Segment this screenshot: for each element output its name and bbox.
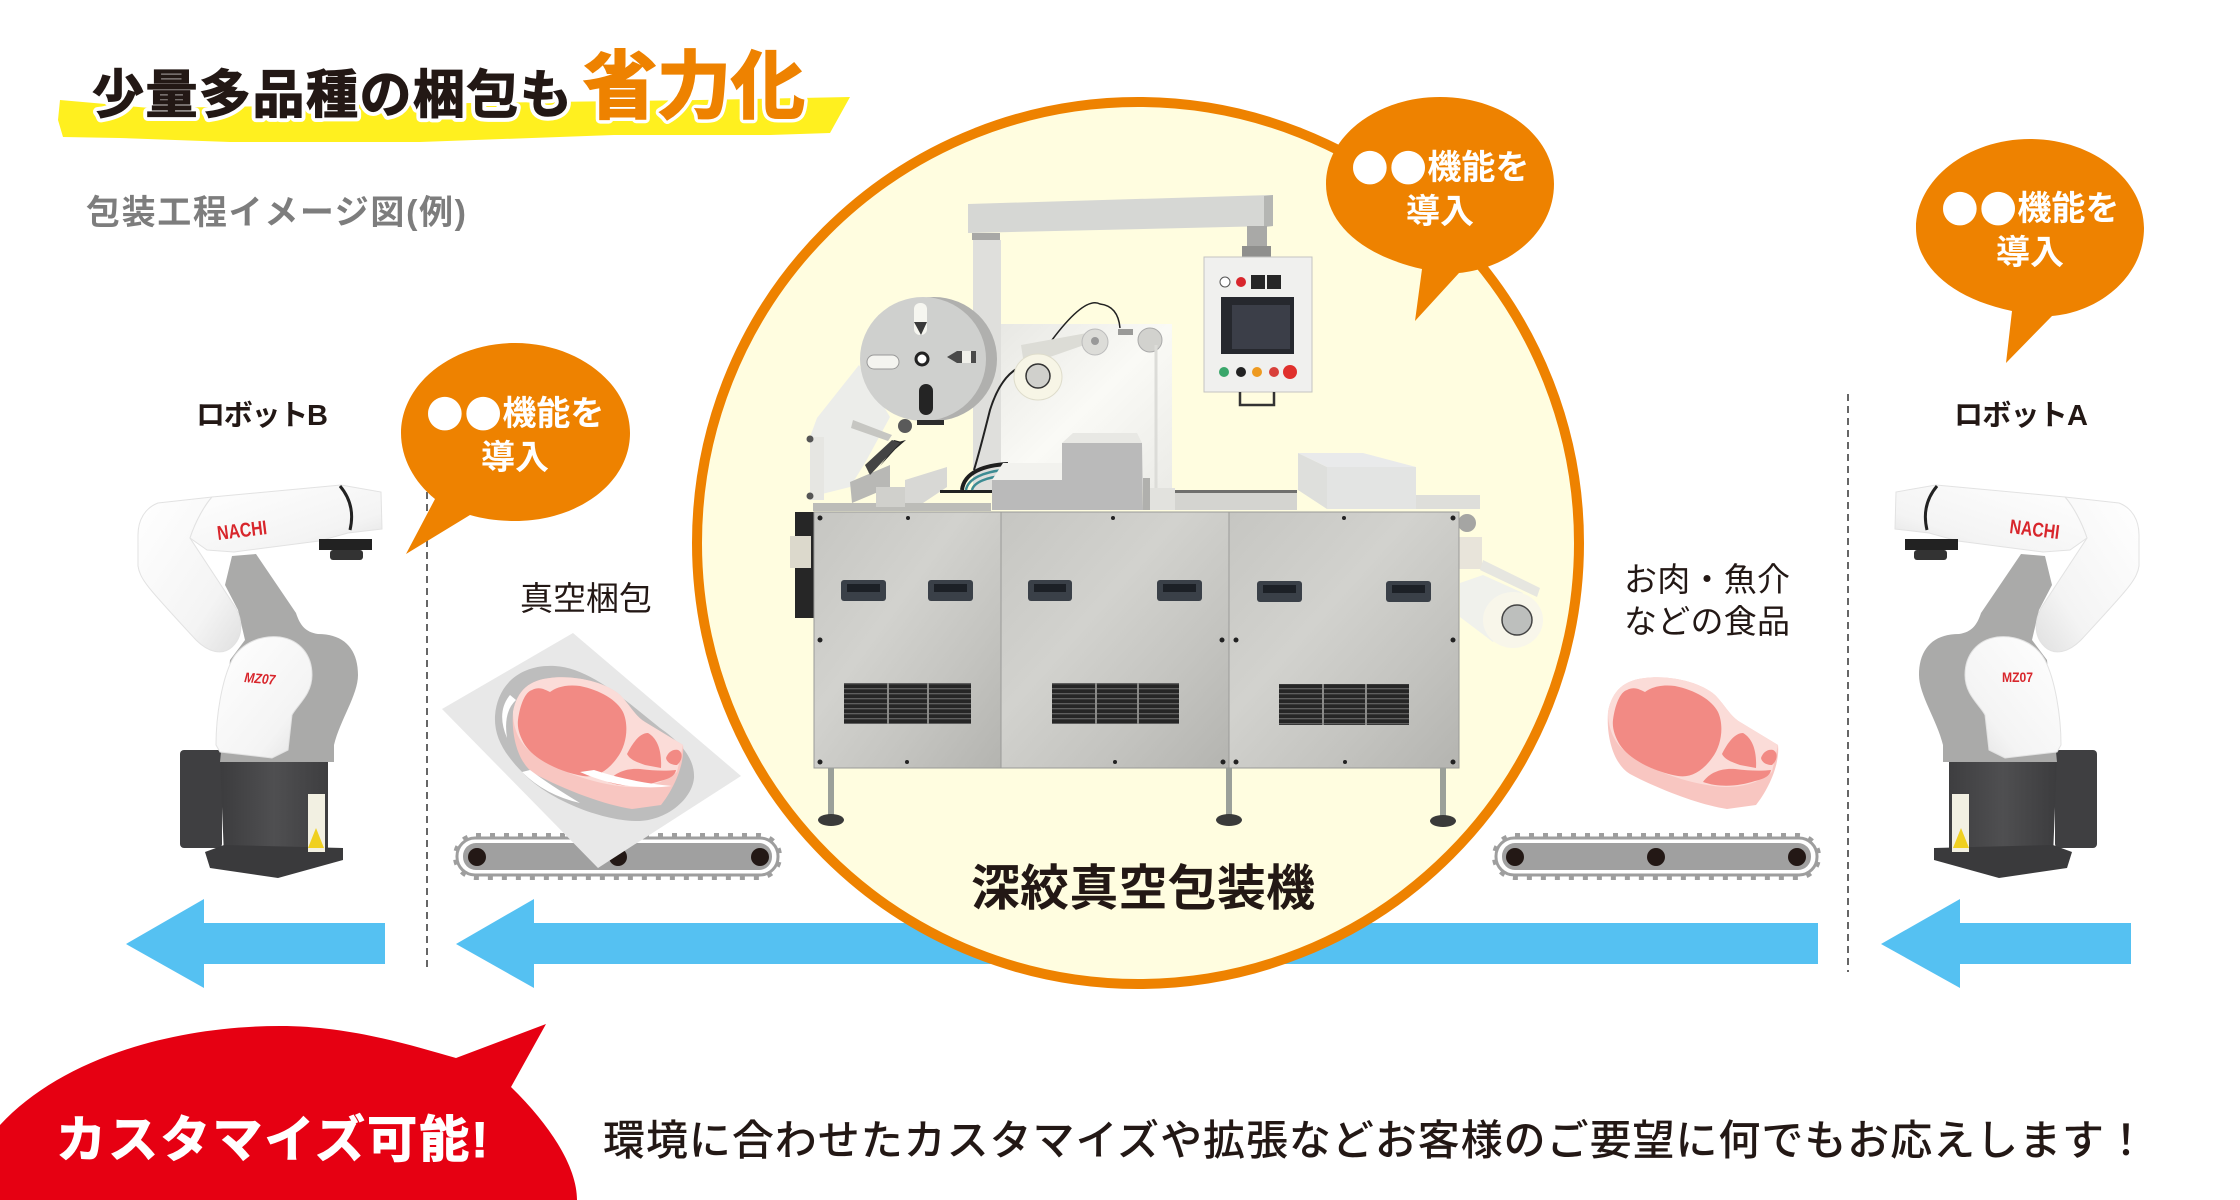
callout: customizable [0,1024,577,1200]
wrap highlights [502,695,672,803]
machine rail [1143,478,1480,510]
conveyor: left [455,835,780,878]
robot A logo: NACHI [2008,516,2061,544]
label: food: などの食品 [1624,603,1790,640]
divider: right dashed line [1847,394,1849,972]
robot B forearm [190,485,382,552]
robot B model: MZ07 [244,669,277,688]
robot B logo: NACHI [216,517,268,545]
machine film reel [860,297,997,425]
robot B gray link [220,554,358,762]
bottom message: 環境に合わせたカスタマイズや拡張などお客様のご要望に何でもお応えします！ [603,1117,2147,1164]
label: vacuum packaging: 真空梱包 [520,580,652,617]
arrow: left [126,899,385,988]
robot A model: MZ07 [2002,669,2033,685]
title text orange: 省力化 [583,45,805,128]
robot B base [180,750,343,878]
label: robot B: ロボットB [196,399,328,432]
robot A [1895,485,2139,878]
title text orange: 省力化 [583,45,805,128]
title [58,45,850,142]
callout: robot B: ●●機能を [426,385,604,436]
machine film roll right [1458,514,1543,648]
machine name: 深絞真空包装機 [971,862,1315,916]
machine film roll top [1014,354,1062,400]
arrow: right [1881,899,2131,988]
machine side fitting left [790,512,815,618]
icon: raw meat [1608,677,1778,809]
panel: vacuum packaging machine circle [697,102,1579,984]
machine overhead beam [968,195,1273,490]
machine legs [818,768,1456,827]
machine film guide sheet [810,365,890,497]
subtitle: 包装工程イメージ図(例) [86,194,466,232]
robot A body mirrored [1895,485,2139,878]
callout: robot B [401,343,630,554]
robot B flange [319,486,372,560]
label: food [1624,561,1790,640]
machine: deep-draw vacuum packaging machine [790,195,1543,827]
robot B [138,485,382,878]
meat wrapped [513,677,683,809]
machine cable and tension arm [974,303,1162,490]
callout: robot A: 導入 [1996,234,2064,272]
divider: left dashed line [426,492,428,972]
callout: center machine: 導入 [1406,193,1474,231]
machine back plate [1001,324,1172,490]
machine right cover box [1298,453,1416,509]
callout: robot A: ●●機能を [1941,180,2119,231]
title text dark: 少量多品種の梱包も [92,67,572,125]
robot B upper arm [138,497,241,652]
machine cabinet [814,512,1459,768]
vacuum seal outline [495,666,694,821]
conveyor: right [1494,835,1819,878]
machine vents [844,683,1409,725]
label: robot A: ロボットA [1954,399,2088,432]
title text dark: 少量多品種の梱包も [92,67,572,125]
title highlight band [58,97,850,142]
callout: customizable: カスタマイズ可能! [56,1112,488,1168]
callout: center machine [1326,97,1554,321]
machine stepped cover [992,433,1143,510]
callout: robot B: 導入 [481,439,549,477]
machine left mechanism [806,419,1008,511]
machine handles [841,580,1431,602]
label: food: お肉・魚介 [1624,561,1790,598]
callout: robot A [1916,139,2144,363]
machine control panel [1204,257,1312,405]
arrow: middle flow [456,899,1818,988]
robot B shoulder [216,637,312,758]
film sheet [442,633,741,868]
icon: vacuum packed meat [442,633,741,868]
callout: center machine: ●●機能を [1351,139,1529,190]
